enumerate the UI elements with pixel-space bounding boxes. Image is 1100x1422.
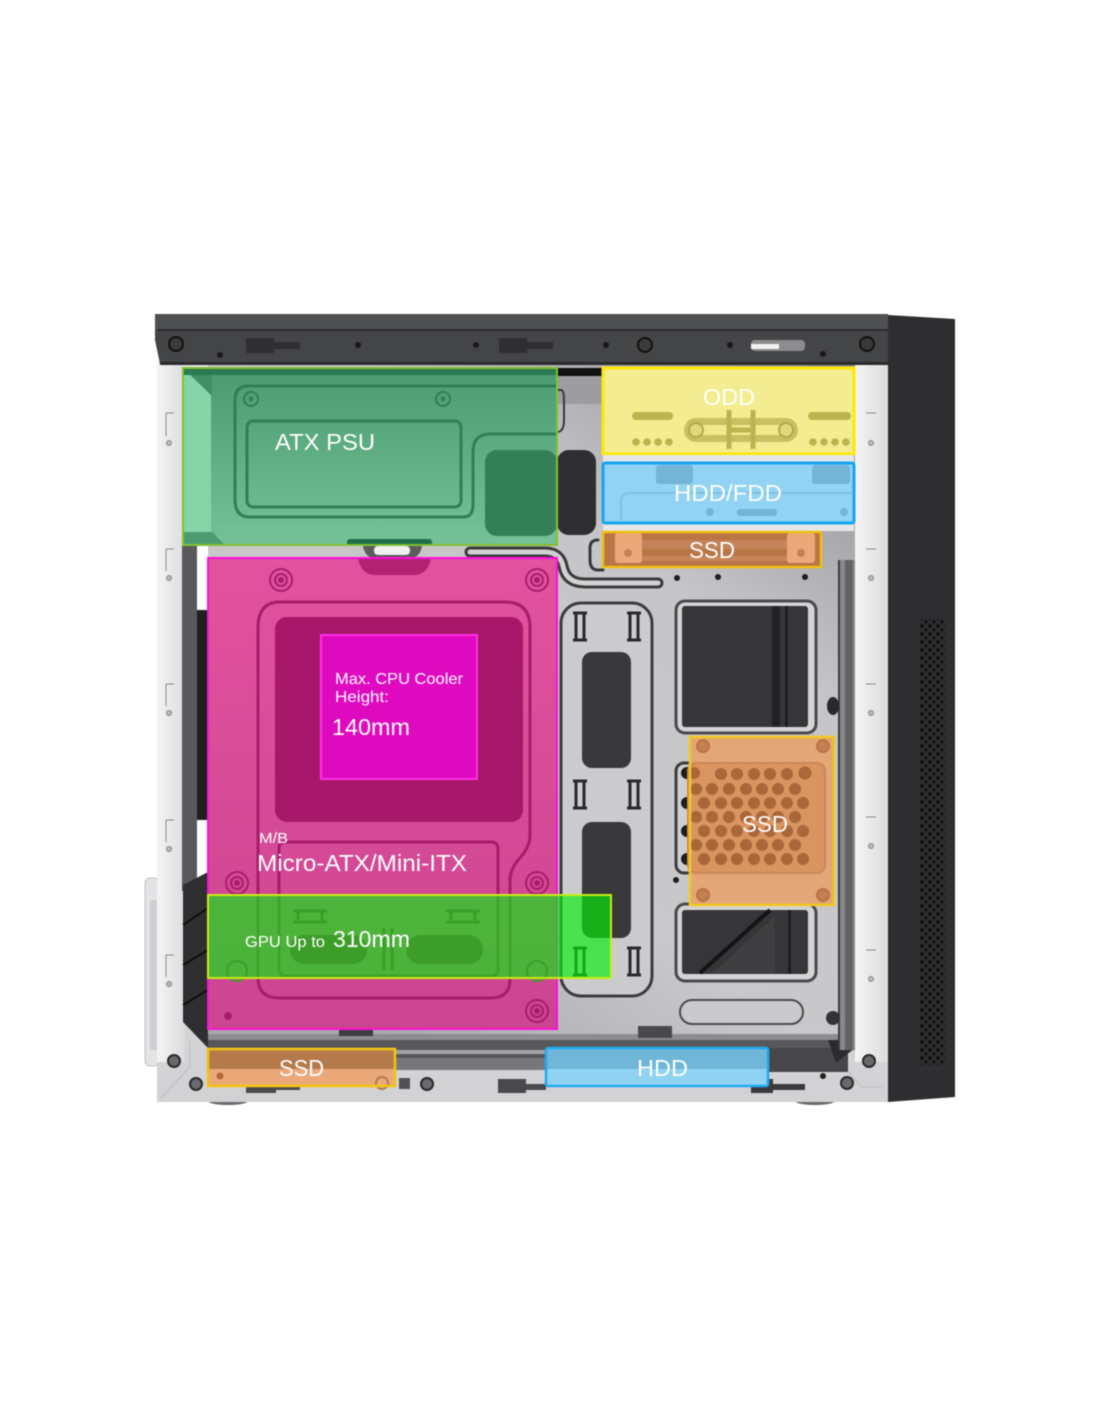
label: 140mm: 140mm — [332, 714, 410, 740]
panel: motherboard zone — [208, 558, 557, 1029]
case rear bracket — [145, 878, 159, 1066]
frame bottom screws and tabs — [168, 1055, 875, 1093]
label: ODD: ODD — [703, 384, 755, 410]
label: 310mm: 310mm — [333, 926, 410, 952]
top dark panel — [155, 314, 888, 365]
right vertical rail — [826, 560, 855, 1050]
left edge dark slots — [182, 545, 209, 1048]
panel: bottom HDD bay — [546, 1048, 768, 1086]
panel: bottom SSD bay — [208, 1049, 395, 1089]
top panel screws and tabs — [169, 337, 874, 358]
tool-free bracket tab — [347, 540, 432, 558]
label: Height: Height: — [335, 689, 389, 706]
panel: hidden window behind ssd — [676, 763, 706, 873]
panel: side SSD mount — [688, 737, 834, 905]
label: HDD/FDD: HDD/FDD — [674, 480, 782, 506]
bottom oval slot — [680, 1000, 803, 1024]
label: M/B: M/B — [259, 830, 288, 847]
panel: light strip between bays — [603, 455, 854, 531]
dark cable opening behind psu — [557, 368, 603, 535]
panel: GPU zone — [208, 895, 611, 981]
frame mounting holes — [166, 413, 876, 986]
panel: vented plate — [561, 603, 652, 996]
label: Micro-ATX/Mini-ITX: Micro-ATX/Mini-ITX — [257, 850, 467, 876]
label: GPU Up to: GPU Up to — [245, 934, 325, 951]
small rivets — [673, 574, 808, 883]
case feet — [208, 1097, 835, 1105]
label: ATX PSU: ATX PSU — [275, 429, 375, 455]
panel: ATX PSU zone — [183, 368, 557, 546]
routed channel — [470, 540, 658, 583]
panel: top SSD bay — [603, 532, 821, 567]
right side panel — [888, 315, 955, 1102]
panel: upper window — [676, 601, 816, 733]
case interior plate — [208, 362, 855, 1052]
label: SSD: SSD — [742, 811, 788, 837]
panel: ODD bay — [603, 368, 854, 454]
label: SSD: SSD — [279, 1055, 324, 1081]
interior floor band — [208, 1024, 855, 1072]
panel: lower window — [676, 904, 816, 981]
label: Max. CPU Cooler Height: Max. CPU Cooler — [335, 671, 464, 688]
case white frame — [157, 362, 888, 1102]
label: SSD: SSD — [689, 537, 735, 563]
label: HDD: HDD — [637, 1055, 688, 1081]
panel: HDD/FDD bay — [603, 463, 854, 523]
panel: CPU cooler zone — [321, 635, 477, 779]
